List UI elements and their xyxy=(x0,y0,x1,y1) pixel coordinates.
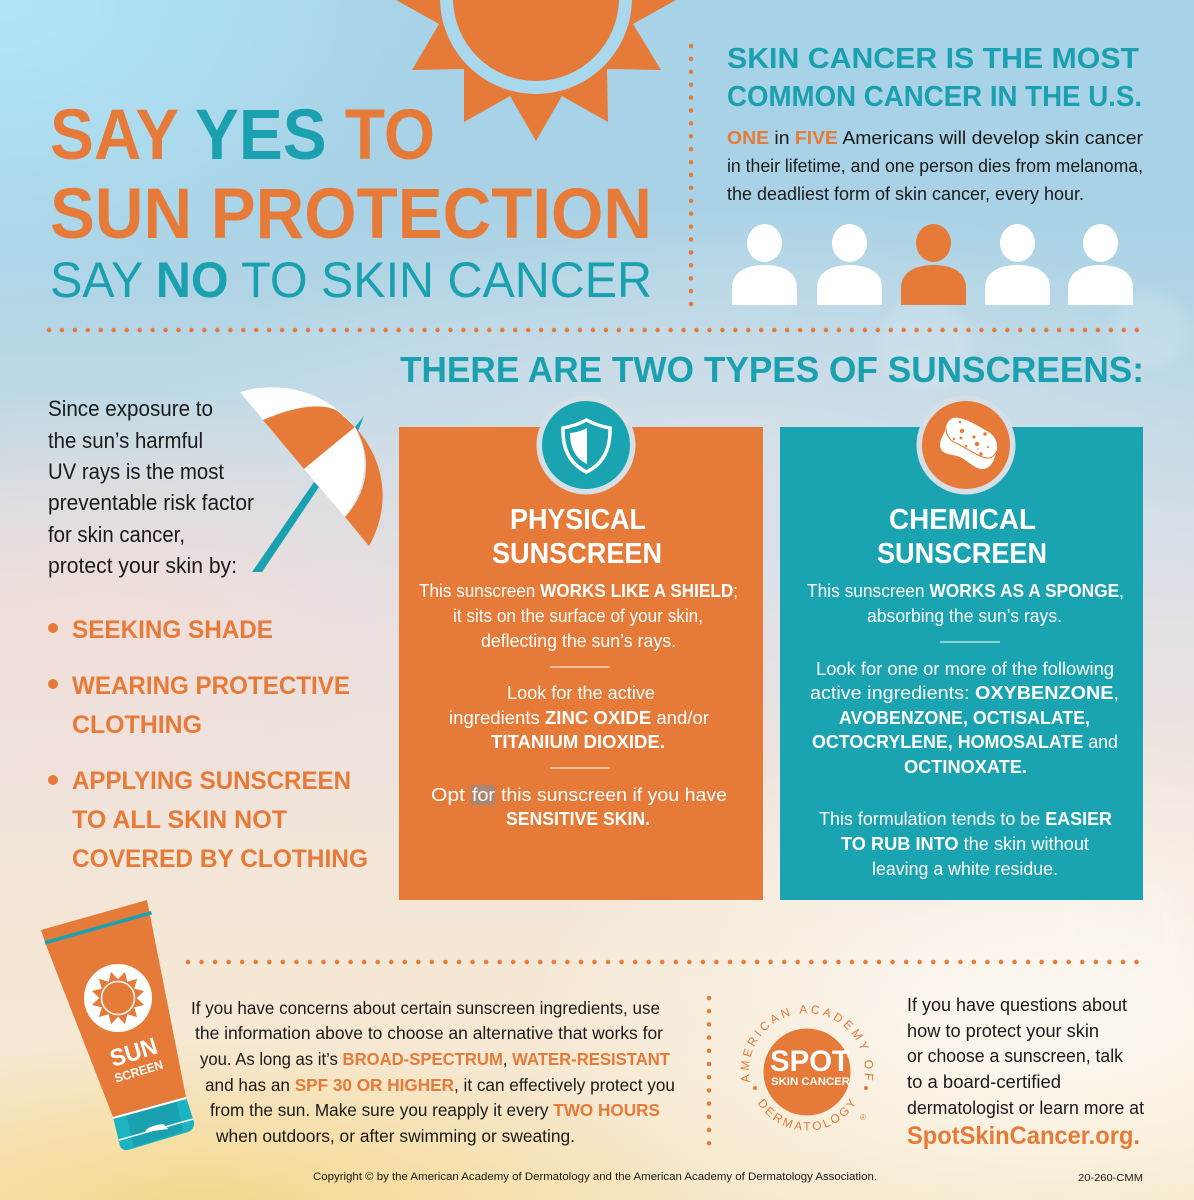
text block: intro: protect your skin by: xyxy=(48,553,237,578)
vertical dotted divider: header xyxy=(689,46,693,304)
text block: physical details: TITANIUM DIOXIDE. xyxy=(491,732,665,752)
heading: chemical sunscreen: SUNSCREEN xyxy=(877,538,1047,570)
heading: chemical sunscreen: CHEMICAL xyxy=(889,504,1036,536)
panel: chemical sunscreen xyxy=(780,396,1143,900)
list: protection tips: COVERED BY CLOTHING xyxy=(72,845,368,873)
list: protection tips: CLOTHING xyxy=(72,711,202,739)
icon: sponge xyxy=(916,396,1016,494)
text block: chemical details: AVOBENZONE, OCTISALATE, xyxy=(839,708,1090,728)
heading: chemical sunscreen xyxy=(877,504,1047,570)
text block: one in five: ONE in FIVE Americans will develop skin cancer xyxy=(727,128,1143,148)
heading: physical sunscreen xyxy=(492,504,662,570)
text block: physical details: deflecting the sun’s rays. xyxy=(481,631,676,651)
horizontal dotted divider: lower xyxy=(188,960,1137,964)
text block: physical details: Look for the active xyxy=(507,683,655,703)
text block: one in five xyxy=(727,128,1143,204)
text block: physical details: Opt xyxy=(431,785,465,805)
text block: chemical details: TO RUB INTO the skin without xyxy=(841,834,1089,854)
text block: physical details: for xyxy=(472,785,495,805)
title: SAY YES TO xyxy=(50,96,435,175)
text block: sunscreen ingredients advice: from the sun. Make sure you reapply it every TWO HOURS xyxy=(210,1100,660,1120)
icon: sunscreen tube xyxy=(41,900,194,1150)
text block: intro: Since exposure to xyxy=(48,396,213,421)
copyright: Copyright © by the American Academy of Dermatology and the American Academy of Dermatology Association. xyxy=(313,1171,877,1183)
text block: sunscreen ingredients advice: If you have concerns about certain sunscreen ingredients, use xyxy=(191,998,660,1018)
heading: skin cancer statistic: SKIN CANCER IS THE MOST xyxy=(727,43,1139,75)
heading: two types of sunscreens: THERE ARE TWO TYPES OF SUNSCREENS: xyxy=(400,349,1144,390)
text block: chemical details: This sunscreen WORKS AS A SPONGE, xyxy=(807,581,1124,601)
list: protection tips xyxy=(48,616,368,873)
document code: 20-260-CMM xyxy=(1078,1172,1143,1184)
list: protection tips: APPLYING SUNSCREEN xyxy=(72,767,351,795)
text block: physical details: ingredients ZINC OXIDE and/or xyxy=(449,708,709,728)
text block: intro: for skin cancer, xyxy=(48,522,185,547)
text block: questions: dermatologist or learn more at xyxy=(907,1098,1144,1118)
text block: physical details: this sunscreen if you have xyxy=(501,785,727,805)
text block: one in five: in their lifetime, and one person dies from melanoma, xyxy=(727,156,1143,176)
text block: intro: the sun’s harmful xyxy=(48,428,203,453)
icon: five people xyxy=(732,224,1133,305)
text block: intro xyxy=(48,396,254,578)
heading: skin cancer statistic: COMMON CANCER IN THE U.S. xyxy=(727,81,1142,113)
logo: SPOT Skin Cancer: SPOT xyxy=(770,1045,850,1078)
text block: questions: or choose a sunscreen, talk xyxy=(907,1046,1124,1066)
text block: questions: to a board-certified xyxy=(907,1072,1061,1092)
icon: sunscreen tube: SUN xyxy=(107,1033,161,1073)
title xyxy=(50,96,652,308)
link: website: SpotSkinCancer.org. xyxy=(907,1122,1140,1150)
vertical dotted divider: footer xyxy=(707,998,711,1144)
text block: one in five: the deadliest form of skin cancer, every hour. xyxy=(727,184,1084,204)
text block: chemical details xyxy=(807,581,1124,879)
text block: sunscreen ingredients advice: and has an SPF 30 OR HIGHER, it can effectively protect you xyxy=(205,1075,675,1095)
text block: chemical details: OCTOCRYLENE, HOMOSALATE and xyxy=(812,732,1118,752)
text block: questions xyxy=(907,995,1144,1118)
heading: physical sunscreen: PHYSICAL xyxy=(510,504,646,536)
horizontal dotted divider: upper xyxy=(49,328,1137,332)
icon: shield xyxy=(536,396,636,494)
panel: physical sunscreen xyxy=(399,396,763,900)
list: protection tips: SEEKING SHADE xyxy=(72,616,273,644)
text block: physical details xyxy=(419,581,738,829)
heading: physical sunscreen: SUNSCREEN xyxy=(492,538,662,570)
text block: physical details: it sits on the surface of your skin, xyxy=(453,606,703,626)
text block: chemical details: absorbing the sun’s rays. xyxy=(867,606,1062,626)
text block: chemical details: leaving a white residue. xyxy=(872,859,1058,879)
text block: physical details: SENSITIVE SKIN. xyxy=(506,809,650,829)
logo: SPOT Skin Cancer: DERMATOLOGY xyxy=(758,1098,855,1130)
logo: SPOT Skin Cancer xyxy=(740,1005,874,1130)
text block: questions: If you have questions about xyxy=(907,995,1127,1015)
icon: umbrella xyxy=(240,387,383,572)
text block: chemical details: OCTINOXATE. xyxy=(904,757,1027,777)
text block: sunscreen ingredients advice xyxy=(191,998,675,1146)
text block: sunscreen ingredients advice: when outdoors, or after swimming or sweating. xyxy=(215,1126,575,1146)
text block: chemical details: Look for one or more of the following xyxy=(816,659,1114,679)
icon: sun xyxy=(396,0,676,141)
list: protection tips: TO ALL SKIN NOT xyxy=(72,806,287,834)
list: protection tips: WEARING PROTECTIVE xyxy=(72,672,350,700)
logo: SPOT Skin Cancer: ® xyxy=(860,1113,866,1122)
title: SUN PROTECTION xyxy=(50,175,652,254)
text block: questions: how to protect your skin xyxy=(907,1021,1099,1041)
text block: intro: preventable risk factor xyxy=(48,490,254,515)
text block: sunscreen ingredients advice: the information above to choose an alternative that works for xyxy=(195,1023,663,1043)
heading: skin cancer statistic xyxy=(727,43,1142,113)
text block: physical details: This sunscreen WORKS LIKE A SHIELD; xyxy=(419,581,738,601)
logo: SPOT Skin Cancer: AMERICAN ACADEMY OF xyxy=(740,1005,874,1082)
icon: sunscreen tube: SCREEN xyxy=(113,1058,165,1086)
text block: chemical details: active ingredients: OXYBENZONE , xyxy=(810,683,1119,703)
text block: chemical details: This formulation tends to be EASIER xyxy=(819,809,1112,829)
text block: sunscreen ingredients advice: you. As long as it’s BROAD-SPECTRUM, WATER-RESISTANT xyxy=(200,1049,670,1069)
logo: SPOT Skin Cancer: SKIN CANCER xyxy=(771,1076,850,1088)
title: SAY NO TO SKIN CANCER xyxy=(50,252,652,308)
text block: intro: UV rays is the most xyxy=(48,459,224,484)
